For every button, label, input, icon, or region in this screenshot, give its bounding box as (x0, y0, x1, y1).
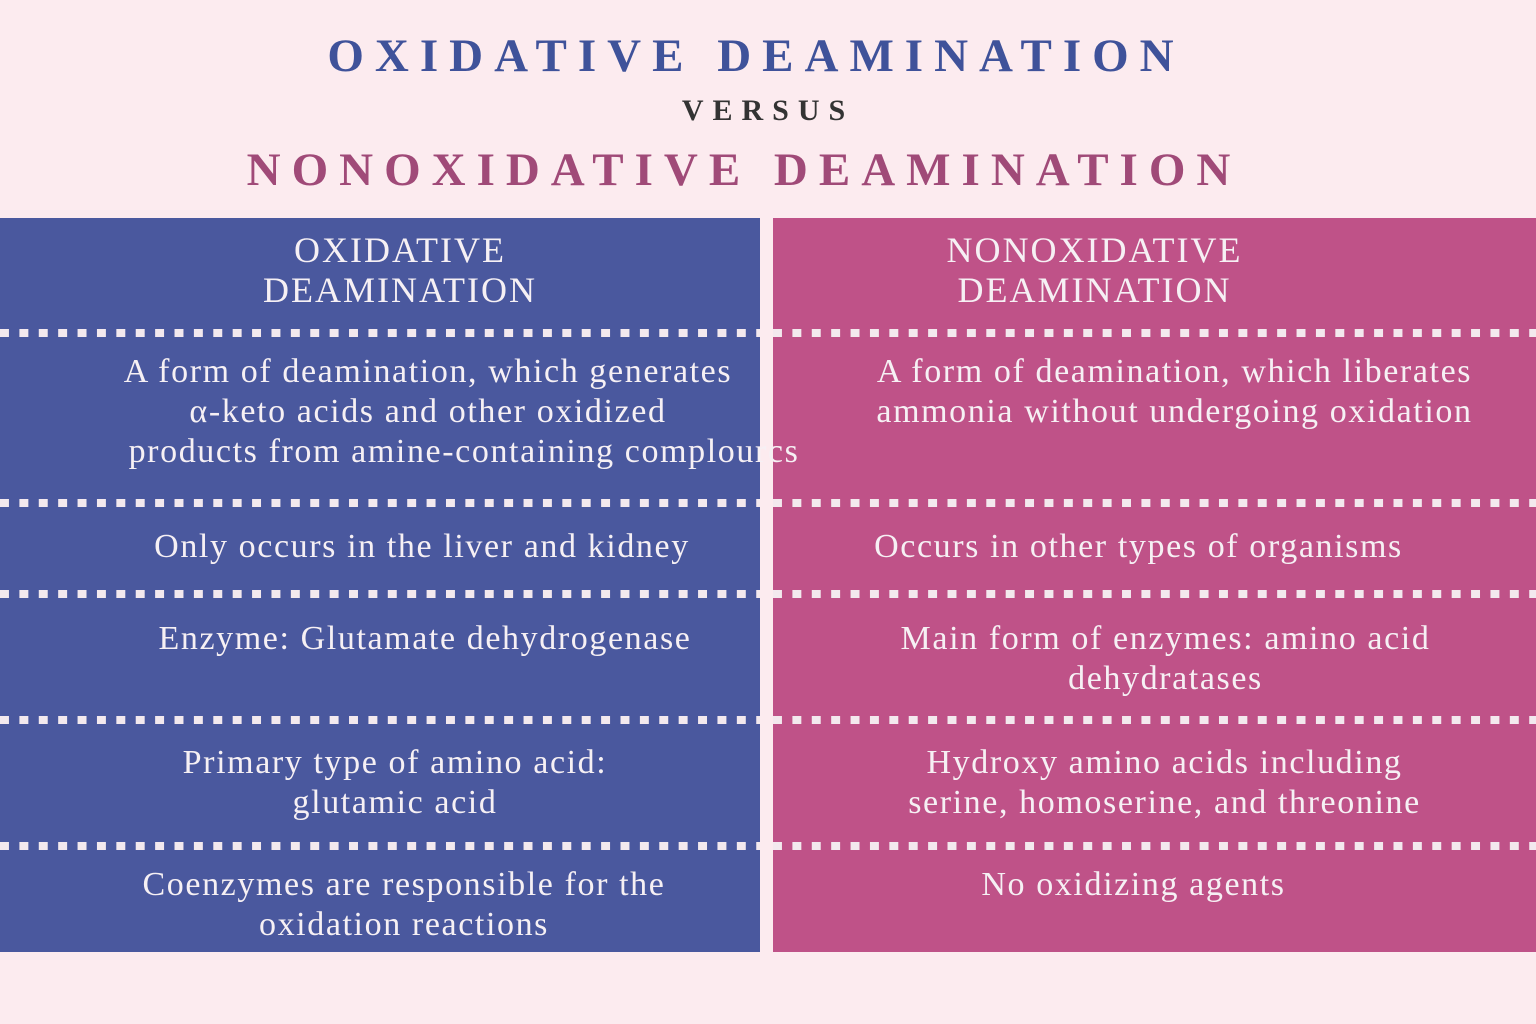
text: occurrence: Occurs in other types of organisms (874, 528, 1403, 565)
heading: nonoxidative (947, 230, 1242, 310)
text: amino acids: Hydroxy amino acids including (926, 744, 1403, 781)
heading: oxidative: OXIDATIVE (294, 230, 506, 270)
text: amino acids: serine, homoserine, and threonine (908, 784, 1421, 821)
text: definition: products from amine-containing complourcs (129, 433, 799, 470)
text: enzymes (901, 620, 1430, 697)
text: coenzymes (142, 866, 665, 943)
text: amino acid: glutamic acid (293, 784, 497, 821)
text: enzymes: Main form of enzymes: amino acid (901, 620, 1430, 657)
panel: nonoxidative (773, 218, 1536, 952)
heading: nonoxidative: DEAMINATION (958, 270, 1231, 310)
title: versus: VERSUS (682, 94, 854, 127)
text: oxidizing agents: No oxidizing agents (981, 866, 1286, 903)
title: oxidative deamination: OXIDATIVE DEAMINATION (327, 30, 1185, 82)
panel: oxidative (0, 218, 760, 952)
text: coenzymes: Coenzymes are responsible for the (142, 866, 665, 903)
text: definition (876, 353, 1473, 430)
heading: oxidative (263, 230, 537, 310)
heading: oxidative: DEAMINATION (263, 270, 537, 310)
text: amino acids (908, 744, 1421, 821)
text: amino acid (183, 744, 607, 821)
text: definition (124, 353, 799, 470)
text: enzymes: dehydratases (1068, 660, 1263, 697)
text: enzyme: Enzyme: Glutamate dehydrogenase (158, 620, 691, 657)
text: coenzymes: oxidation reactions (259, 906, 549, 943)
title: nonoxidative deamination: NONOXIDATIVE DEAMINATION (247, 144, 1241, 196)
text: occurrence: Only occurs in the liver and kidney (154, 528, 690, 565)
text: definition: A form of deamination, which liberates (877, 353, 1472, 390)
heading: nonoxidative: NONOXIDATIVE (947, 230, 1242, 270)
text: definition: A form of deamination, which generates (124, 353, 732, 390)
text: definition: α-keto acids and other oxidized (189, 393, 667, 430)
text: amino acid: Primary type of amino acid: (183, 744, 607, 781)
text: definition: ammonia without undergoing oxidation (876, 393, 1473, 430)
